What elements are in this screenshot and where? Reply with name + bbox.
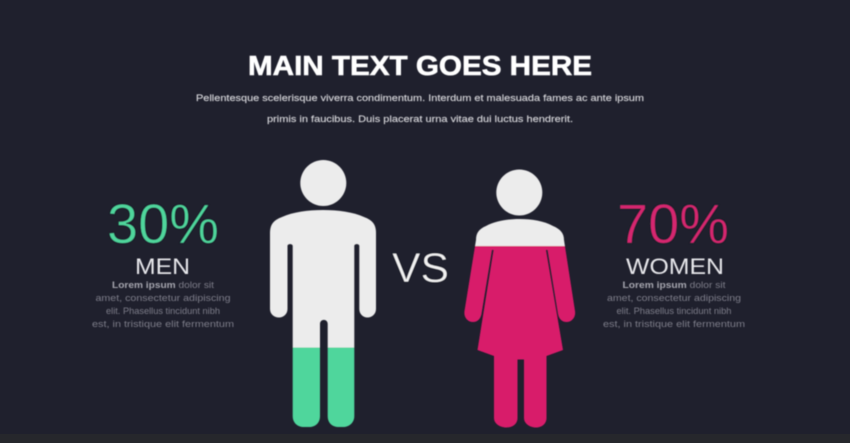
subtitle text: primis in faucibus. Duis placerat urna vitae dui luctus hendrerit. <box>267 114 573 125</box>
men label: MEN <box>135 254 190 279</box>
women percentage: 70% <box>617 192 729 255</box>
men description: Lorem ipsum dolor sit <box>112 280 214 291</box>
women label: WOMEN <box>626 254 724 279</box>
men description: elit. Phasellus tincidunt nibh <box>106 306 220 317</box>
men description: est, in tristique elit fermentum <box>92 319 234 330</box>
subtitle text <box>196 93 644 125</box>
women description: est, in tristique elit fermentum <box>603 319 745 330</box>
men percentage: 30% <box>107 192 219 255</box>
women description: amet, consectetur adipiscing <box>607 293 741 304</box>
icon: man figure 30% filled <box>270 160 376 427</box>
title: MAIN TEXT GOES HERE <box>248 50 592 81</box>
women description <box>603 280 745 330</box>
panel: men statistics <box>92 192 234 330</box>
panel: women statistics <box>603 192 745 330</box>
women description: elit. Phasellus tincidunt nibh <box>616 306 732 317</box>
men description: amet, consectetur adipiscing <box>96 293 230 304</box>
men description <box>92 280 234 330</box>
subtitle text: Pellentesque scelerisque viverra condimentum. Interdum et malesuada fames ac ante ipsum <box>196 93 644 104</box>
icon: woman figure 70% filled <box>464 170 575 428</box>
infographic <box>92 54 745 428</box>
women description: Lorem ipsum dolor sit <box>622 280 726 291</box>
versus label: VS <box>392 244 449 291</box>
